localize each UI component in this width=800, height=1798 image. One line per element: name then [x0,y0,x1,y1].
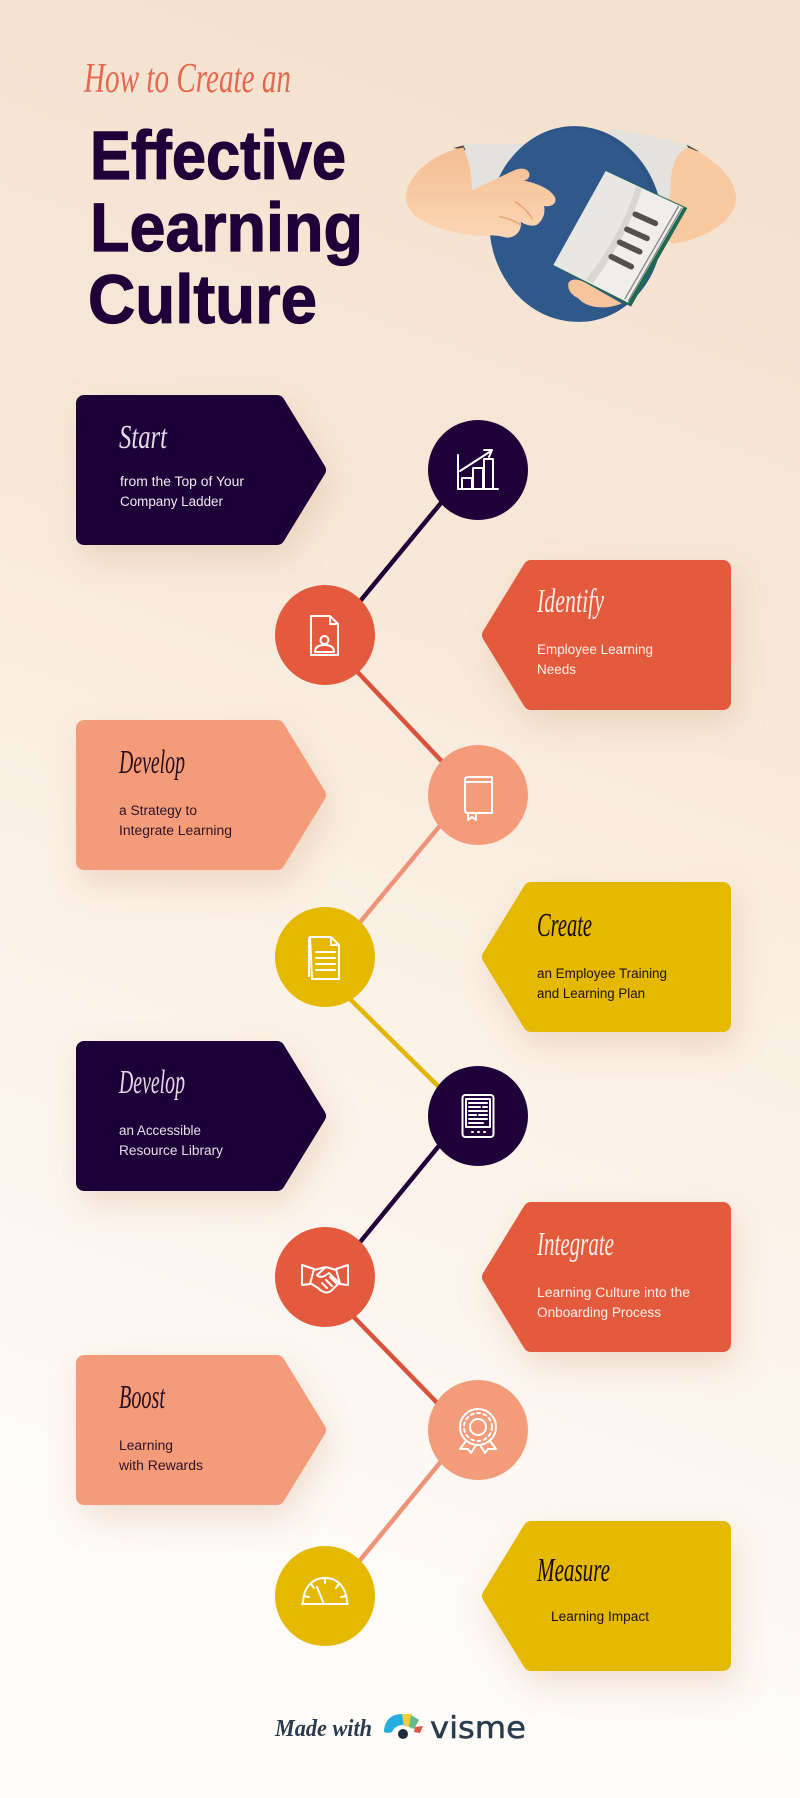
step 4 card: Create: and Learning Plan [537,986,645,1001]
step 7 card: Boost: with Rewards [118,1458,203,1473]
step 8 card: Measure: Learning Impact [551,1609,649,1624]
connector lines between circles [345,492,450,1570]
title: Learning [90,189,363,266]
step 6 card: Integrate: Integrate [536,1226,614,1263]
step 2 card: Identify: Identify [536,583,605,620]
step 5 card: Develop a Resource Library: Develop [118,1064,185,1101]
step 6 card: Integrate: Learning Culture into the [537,1285,690,1300]
step 2 card: Identify: Needs [537,662,576,677]
circle 6 with handshake icon [275,1227,375,1327]
step 5 card: Develop a Resource Library [84,1049,318,1183]
hero illustration: hands holding a book over a blue disc [406,118,736,330]
footer: Made with visme [274,1711,526,1746]
step 3 card: Develop a Strategy: Develop [118,744,185,781]
step 3 card: Develop a Strategy: a Strategy to [119,803,197,818]
visme logo mark [384,1714,423,1739]
footer: Made with visme: visme [430,1711,526,1746]
step 3 card: Develop a Strategy [84,728,318,862]
step 1 card: Start: Start [119,419,168,456]
circle 2 with document person icon [275,585,375,685]
footer: Made with visme: Made with [274,1716,372,1742]
title: Effective [90,117,346,194]
step 4 card: Create: an Employee Training [537,966,667,981]
step 8 card: Measure: Measure [536,1552,610,1589]
step 7 card: Boost: Boost [119,1379,166,1416]
circle 5 with e-reader icon [428,1066,528,1166]
step 4 card: Create [490,890,723,1024]
circle 1 with chart icon [428,420,528,520]
circle 4 with document list icon [275,907,375,1007]
step 1 card: Start: from the Top of Your [120,474,245,489]
circle 8 with speedometer icon [275,1546,375,1646]
step 1 card: Start [84,403,318,537]
title: Culture [88,261,317,338]
step 8 card: Measure [490,1529,723,1663]
header eyebrow: How to Create an: How to Create an [83,56,291,102]
step 5 card: Develop a Resource Library: an Accessible [119,1123,201,1138]
step 2 card: Identify [490,568,723,702]
step 3 card: Develop a Strategy: Integrate Learning [119,823,232,838]
title [88,117,363,338]
step 5 card: Develop a Resource Library: Resource Library [119,1143,223,1158]
step 6 card: Integrate: Onboarding Process [537,1305,661,1320]
step 4 card: Create: Create [537,907,592,944]
step 7 card: Boost: Learning [119,1438,173,1453]
step 2 card: Identify: Employee Learning [537,642,653,657]
circle 3 with book icon [428,745,528,845]
step 6 card: Integrate [490,1210,723,1344]
step 1 card: Start: Company Ladder [120,494,223,509]
circle 7 with award badge icon [428,1380,528,1480]
step 7 card: Boost [84,1363,318,1497]
